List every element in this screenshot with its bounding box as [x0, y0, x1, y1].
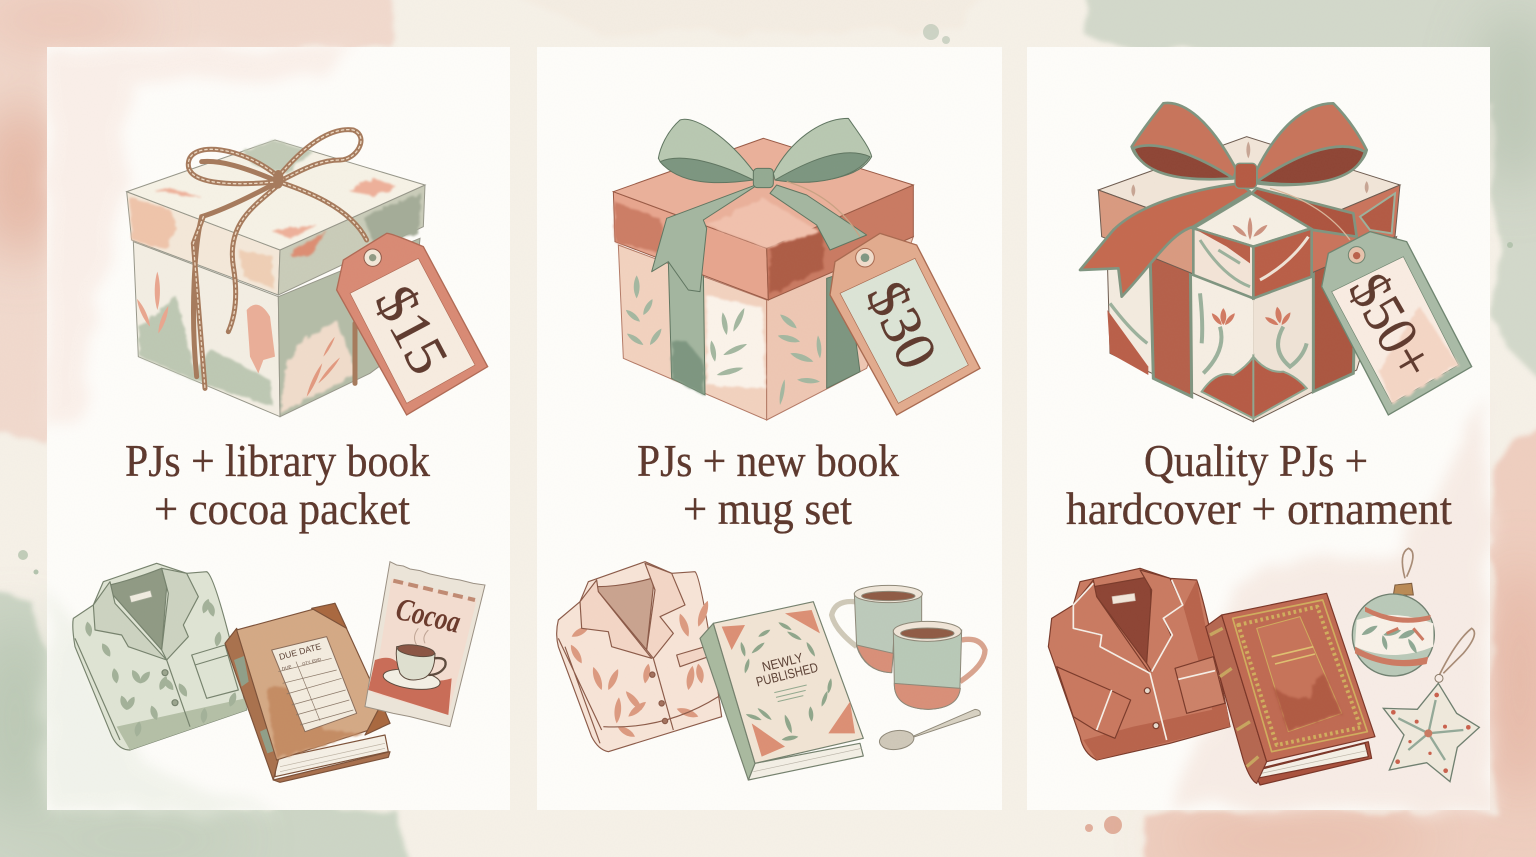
library book: QTY. EDID: [302, 656, 322, 666]
caption: [125, 435, 430, 534]
gift box with $30 tag: [613, 118, 980, 420]
star ornament: [1383, 628, 1479, 782]
cocoa packet: Cocoa: [393, 590, 464, 640]
price tag $15: $15: [363, 276, 460, 385]
caption: [637, 435, 899, 534]
terracotta pajamas: [557, 562, 722, 752]
green ribbon straps: [668, 262, 860, 395]
new book: PUBLISHED: [754, 660, 820, 690]
cocoa packet: [365, 562, 485, 727]
price tag $50+: [1322, 232, 1472, 415]
panel: $30 tier: [537, 47, 1002, 810]
red bow: [1080, 103, 1367, 297]
caption: PJs + library book: [125, 435, 430, 486]
items: pajamas, hardcover, ornaments: [1048, 548, 1479, 785]
hardcover book: [1206, 593, 1375, 785]
pink wash behind items: [1170, 400, 1490, 810]
panel: $50+ tier: [1027, 47, 1490, 810]
caption: [1066, 435, 1452, 534]
panel: $15 tier: [47, 47, 510, 810]
price tag $50+: $50+: [1336, 263, 1446, 390]
gift box with $15 tag: [127, 130, 488, 417]
library book: DUE: [281, 664, 292, 672]
twine bow: [188, 130, 367, 388]
caption: + mug set: [683, 483, 852, 534]
gift box with $50+ tag: [1080, 103, 1472, 422]
rust pajamas: [1048, 568, 1230, 760]
caption: PJs + new book: [637, 435, 899, 486]
new book: NEWLY: [760, 650, 805, 675]
red ribbon straps: [1150, 227, 1357, 397]
items: pajamas, library book, cocoa: [73, 562, 485, 782]
price tag $30: $30: [854, 272, 949, 379]
caption: Quality PJs +: [1144, 435, 1368, 486]
lid centre panel: [1193, 193, 1312, 298]
caption: + cocoa packet: [154, 483, 410, 534]
spoon: [878, 709, 980, 752]
caption: hardcover + ornament: [1066, 483, 1452, 534]
price tag $30: [830, 233, 980, 415]
green ribbon bow: [652, 118, 872, 292]
price tag $15: [337, 233, 488, 415]
items: pajamas, new book, mugs, spoon: [557, 562, 985, 780]
library book: [225, 603, 390, 782]
round ornament: [1352, 548, 1434, 676]
green pajamas: [73, 563, 247, 750]
new book: [700, 602, 863, 780]
library book: DUE DATE: [278, 641, 322, 662]
green mugs: [832, 585, 985, 709]
